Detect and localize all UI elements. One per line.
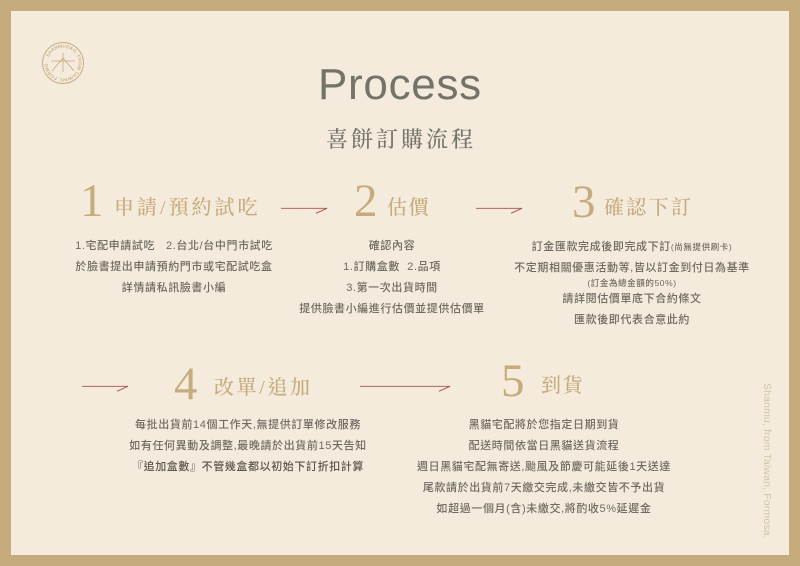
step 5 number: 5 (501, 355, 524, 407)
step 2 number: 2 (354, 175, 378, 227)
step 2 heading (354, 175, 430, 227)
step 5 title: 到貨 (541, 375, 584, 397)
title: Process (318, 60, 482, 109)
step 3 text: 訂金匯款完成後即完成下訂(尚無提供刷卡) (532, 241, 732, 253)
arrow 4 to 5 (360, 386, 450, 392)
step 3 title: 確認下訂 (604, 197, 693, 219)
step 3 text: 不定期相關優惠活動等,皆以訂金到付日為基準 (514, 262, 750, 274)
subtitle: 喜餅訂購流程 (326, 127, 476, 152)
step 2 text: 1.訂購盒數 2.品項 (343, 261, 441, 273)
step 4 text: 如有任何異動及調整,最晚請於出貨前15天告知 (129, 440, 367, 452)
step 4 text: 每批出貨前14個工作天,無提供訂單修改服務 (135, 419, 361, 431)
step 4 text: 『追加盒數』不管幾盒都以初始下訂折扣計算 (132, 460, 364, 472)
step 5 text (417, 418, 671, 515)
step 3 text: 匯款後即代表合意此約 (574, 314, 690, 326)
step 4 heading (174, 358, 313, 410)
step 1 text: 於臉書提出申請預約門市或宅配試吃盒 (75, 261, 273, 273)
step 5 text: 黑貓宅配將於您指定日期到貨 (469, 419, 619, 431)
step 1 heading (80, 175, 261, 227)
step 5 heading (501, 355, 584, 407)
step 2 title: 估價 (387, 197, 430, 219)
step 4 text (129, 418, 367, 472)
step 4 title: 改單/追加 (214, 377, 313, 399)
step 3 heading (572, 176, 693, 228)
step 1 text: 1.宅配申請試吃 2.台北/台中門市試吃 (75, 240, 273, 252)
arrow 3 to 4 (82, 386, 128, 392)
step 1 title: 申請/預約試吃 (114, 197, 261, 219)
step 3 text (514, 240, 750, 326)
arrow 1 to 2 (281, 208, 328, 214)
step 2 text: 3.第一次出貨時間 (346, 282, 438, 294)
step 1 text (75, 240, 273, 294)
step 5 text: 配送時間依當日黑貓送貨流程 (469, 440, 619, 452)
step 3 text: (訂金為總金額的50%) (587, 278, 677, 288)
step 5 text: 週日黑貓宅配無寄送,颱風及節慶可能延後1天送達 (417, 461, 671, 473)
step 2 text: 確認內容 (369, 240, 415, 252)
vertical tagline: Shanmu, from Taiwan, Formosa. (761, 383, 772, 539)
step 5 text: 尾款請於出貨前7天繳交完成,未繳交皆不予出貨 (423, 482, 665, 494)
step 1 number: 1 (80, 175, 104, 227)
step 4 number: 4 (174, 358, 198, 410)
step 3 number: 3 (572, 176, 596, 228)
step 5 text: 如超過一個月(含)未繳交,將酌收5%延遲金 (437, 503, 651, 515)
step 1 text: 詳情請私訊臉書小編 (122, 282, 226, 294)
step 3 text: 請詳閱估價單底下合約條文 (562, 293, 702, 305)
step 2 text: 提供臉書小編進行估價並提供估價單 (299, 303, 485, 315)
step 2 text (299, 240, 485, 315)
arrow 2 to 3 (476, 208, 522, 214)
logo: Shanmudao circular seal: SHANMUDAO. FROM TAIWAN, FORMOSA. (44, 44, 82, 82)
